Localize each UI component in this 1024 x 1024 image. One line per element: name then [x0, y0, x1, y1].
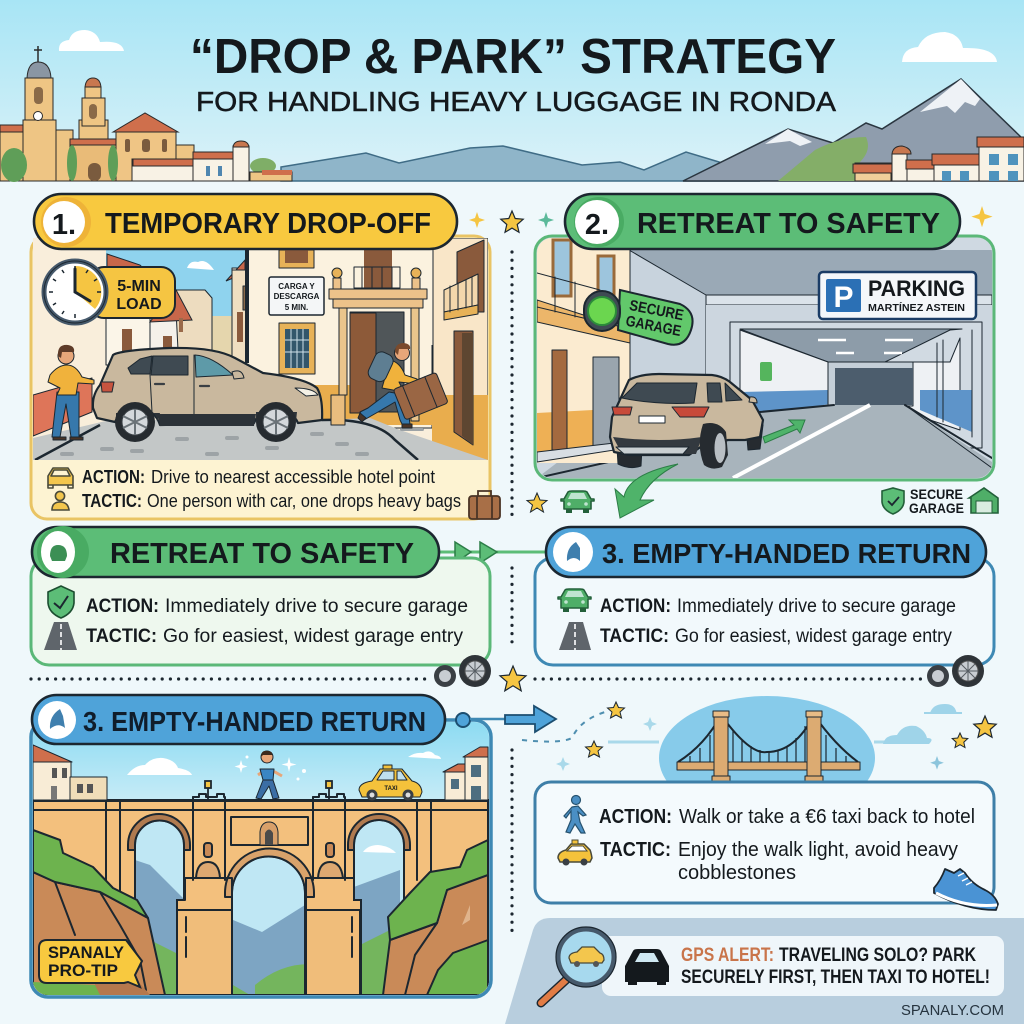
left town skyline [0, 46, 292, 182]
action text [86, 596, 468, 647]
mountains and valley [135, 860, 400, 995]
panel 1 action text: One person with car, one drops heavy bags [147, 491, 461, 511]
heading pill 3 [32, 695, 445, 744]
icon: suitcase [469, 491, 500, 519]
right cliff [383, 840, 488, 995]
cloud right [902, 32, 997, 62]
heading pill: empty-handed return [546, 527, 986, 577]
action text: Immediately drive to secure garage [165, 596, 468, 617]
icon: person [52, 491, 69, 510]
sparkles and stars top row [469, 206, 993, 232]
subtitle: FOR HANDLING HEAVY LUGGAGE IN RONDA [196, 86, 837, 117]
curved green arrow [615, 464, 678, 518]
heading pill 1: 1. [52, 209, 76, 241]
street illustration [33, 238, 488, 460]
bridge illustration [33, 722, 489, 995]
alert message box [602, 936, 1004, 996]
green arrow to garage [763, 420, 805, 443]
suspension bridge illustration [659, 696, 875, 780]
secure garage badge: GARAGE [909, 500, 964, 516]
action text: Immediately drive to secure garage [677, 596, 956, 617]
panel 3: puente nuevo bridge [31, 720, 491, 997]
man beside the car [48, 345, 94, 440]
runner with backpack and suitcase [358, 343, 448, 428]
clock with 5-min load badge: 5-MIN [117, 278, 161, 295]
alert message box: GPS ALERT: [681, 945, 774, 966]
action text: Go for easiest, widest garage entry [163, 626, 464, 647]
secure garage badge: SECURE [910, 486, 963, 502]
dashed flight path with stars [522, 702, 624, 757]
heading pill 1 [34, 194, 457, 249]
heading pill: retreat [32, 526, 439, 578]
left cliff [33, 830, 165, 995]
door sign: CARGA Y [278, 282, 315, 291]
road [33, 418, 488, 460]
action text: ACTION: [600, 596, 671, 617]
panel: empty-handed return action card [535, 558, 994, 665]
icon: green car [558, 589, 591, 612]
secure garage badge [882, 486, 998, 516]
dotted dividers [31, 252, 926, 938]
action text: Go for easiest, widest garage entry [675, 626, 952, 647]
bridge structure [33, 800, 488, 995]
website credit: SPANALY.COM [901, 1002, 1004, 1019]
connector arrow: green chevrons [439, 542, 546, 563]
panel 1 action text: ACTION: [82, 467, 145, 487]
door sign [269, 277, 324, 315]
heading pill: retreat: RETREAT TO SAFETY [110, 538, 414, 570]
icon: road [559, 622, 591, 650]
connector arrow to bridge card [456, 706, 556, 732]
action text: ACTION: [86, 596, 159, 617]
garage illustration [537, 238, 992, 480]
parking sign: PARKING [868, 276, 965, 301]
icon: blue sneaker [934, 869, 998, 910]
panel 1 action text [82, 467, 461, 511]
door sign: DESCARGA [274, 292, 320, 301]
tan suv side view [93, 348, 322, 442]
action text: cobblestones [678, 862, 796, 884]
sparkles around walker [234, 756, 306, 780]
town left [33, 745, 107, 800]
star row with car icon [527, 491, 594, 513]
door sign: 5 MIN. [285, 303, 308, 312]
secure garage traffic light sign: GARAGE [624, 313, 682, 340]
divider star [500, 666, 526, 691]
sparkles and clouds around bridge [556, 705, 996, 771]
lamp posts [205, 781, 332, 800]
header banner [0, 0, 1024, 182]
snowy mountains [683, 79, 1024, 181]
alert message box: TRAVELING SOLO? PARK [779, 945, 976, 966]
heading pill 2: RETREAT TO SAFETY [637, 208, 940, 240]
action text: Enjoy the walk light, avoid heavy [678, 839, 958, 861]
secure garage traffic light sign: SECURE [628, 297, 685, 324]
panel 2: retreat to safety [535, 236, 994, 480]
pro-tip badge: SPANALY [48, 943, 125, 962]
door frame [329, 250, 427, 425]
barred window [279, 323, 315, 374]
wheels right [927, 655, 984, 687]
heading pill: empty-handed return: 3. EMPTY-HANDED RETURN [602, 538, 971, 569]
right town skyline [853, 137, 1024, 181]
action text: TACTIC: [86, 626, 157, 647]
title: “DROP & PARK” STRATEGY [190, 30, 836, 84]
action text: TACTIC: [600, 839, 671, 861]
clock with 5-min load badge [44, 261, 175, 323]
secure garage traffic light sign [584, 290, 693, 345]
gps alert banner [505, 918, 1024, 1024]
clock with 5-min load badge: LOAD [116, 296, 162, 313]
cloud left [59, 30, 124, 51]
action text: TACTIC: [600, 626, 669, 647]
far mountains [281, 146, 760, 181]
heading pill 2: 2. [585, 209, 609, 241]
pro-tip badge [39, 940, 142, 987]
action text [599, 806, 975, 884]
heading pill 1: TEMPORARY DROP-OFF [105, 208, 431, 240]
action text [600, 596, 956, 647]
wheels left [434, 655, 491, 687]
action text: ACTION: [599, 806, 672, 828]
tan suv rear view [610, 374, 763, 469]
yellow taxi: TAXI [384, 786, 398, 792]
panel 1 action text: Drive to nearest accessible hotel point [151, 467, 435, 487]
icon: walker [564, 796, 586, 833]
heading pill 2 [565, 194, 960, 249]
heading pill 3: 3. EMPTY-HANDED RETURN [83, 706, 426, 737]
magnifying glass with car [541, 927, 616, 1003]
parking sign: P [833, 281, 854, 314]
panel 1 action text: TACTIC: [82, 491, 142, 511]
pro-tip badge: PRO-TIP [48, 961, 118, 980]
icon: road [44, 622, 77, 650]
yellow taxi [359, 765, 422, 800]
panel: walk or taxi card [535, 782, 994, 903]
parking sign [819, 272, 976, 319]
panel: retreat to safety action card [31, 558, 490, 665]
action text: Walk or take a €6 taxi back to hotel [679, 806, 975, 828]
walking person [256, 751, 282, 799]
town right [443, 747, 488, 800]
panel 1: temporary drop-off [31, 236, 500, 519]
icon: taxi [558, 840, 592, 866]
icon: car outline [48, 468, 73, 488]
icon: black car front [625, 949, 669, 985]
parking sign: MARTÍNEZ ASTEIN [868, 301, 965, 314]
icon: shield [48, 586, 74, 618]
